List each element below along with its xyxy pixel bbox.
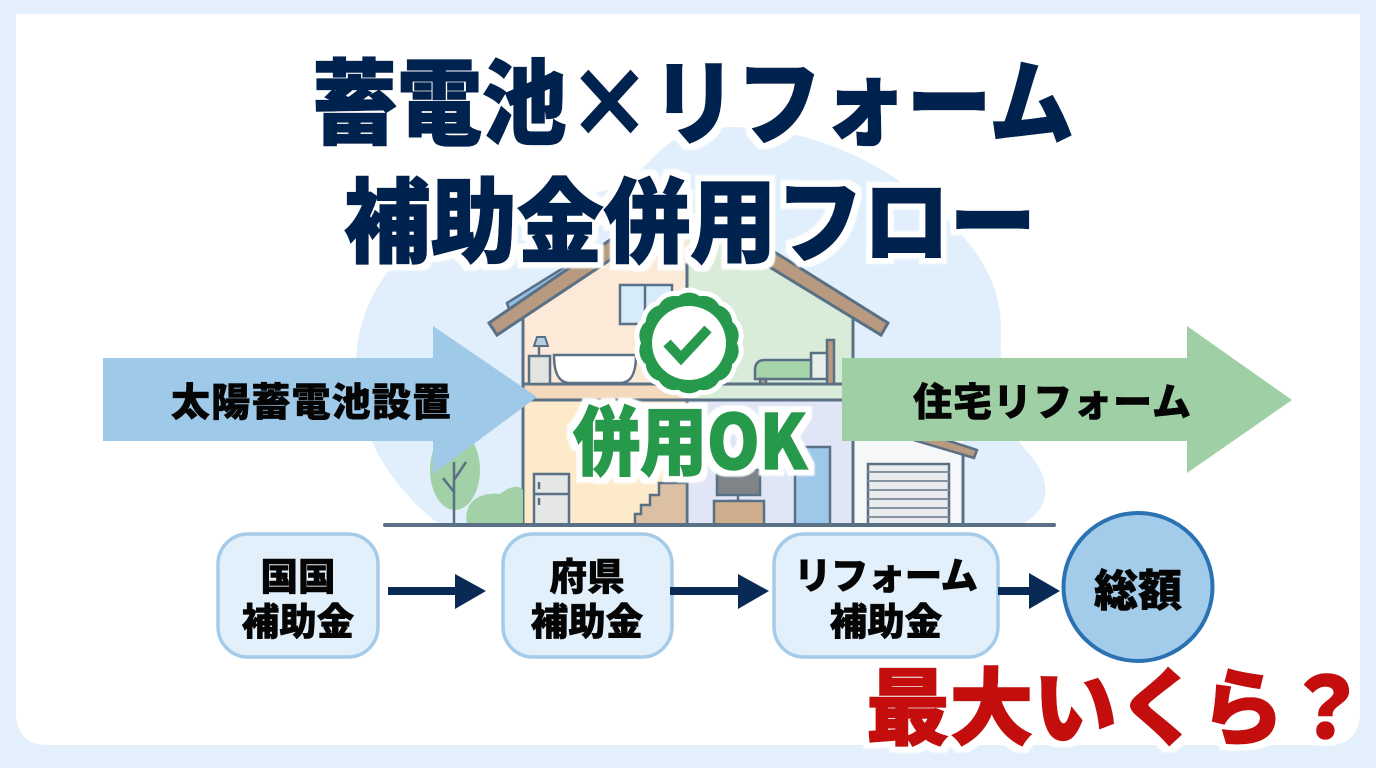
arrow: flow 1 [388, 574, 486, 609]
flow: renovation subsidy [774, 534, 998, 657]
door [795, 447, 830, 525]
badge: check mark [639, 293, 739, 393]
callout: how much at most: 最大いくら？ [866, 642, 1368, 763]
arrow: home renovation: 住宅リフォーム [913, 382, 1191, 425]
flow: national subsidy: 国国 [260, 556, 336, 598]
bed [755, 340, 834, 384]
flow: renovation subsidy: リフォーム [794, 555, 978, 597]
title: 蓄電池×リフォーム [312, 29, 1074, 164]
arrow: flow 2 [670, 574, 769, 609]
refrigerator [534, 474, 569, 525]
flow: prefecture subsidy: 補助金 [531, 601, 644, 643]
title [312, 29, 1074, 282]
title: 補助金併用フロー [344, 149, 1036, 282]
tree and shrub [430, 430, 523, 525]
house illustration [385, 195, 1054, 525]
house walls [523, 195, 853, 525]
arrow: flow 3 [998, 573, 1060, 609]
flow: total: 総額 [1094, 567, 1182, 616]
window [620, 285, 672, 324]
flow: prefecture subsidy [503, 534, 672, 657]
solar panel [507, 245, 606, 312]
garage [853, 425, 977, 525]
flow: total [1064, 513, 1212, 661]
television stand [714, 470, 764, 525]
background blob [356, 127, 1045, 525]
bathtub [554, 355, 636, 383]
flow: national subsidy: 補助金 [242, 601, 355, 643]
stairs [635, 483, 687, 525]
arrow: home renovation [842, 326, 1292, 473]
label: combined use OK: 併用OK [573, 382, 808, 491]
arrow: solar battery installation: 太陽蓄電池設置 [171, 382, 451, 425]
roof [489, 240, 888, 335]
lamp and side table [529, 337, 550, 384]
flow: renovation subsidy: 補助金 [830, 601, 943, 643]
arrow: solar battery installation [103, 326, 537, 474]
flow: national subsidy [218, 534, 378, 657]
flow: prefecture subsidy: 府県 [550, 556, 624, 598]
ground line [385, 523, 1054, 527]
